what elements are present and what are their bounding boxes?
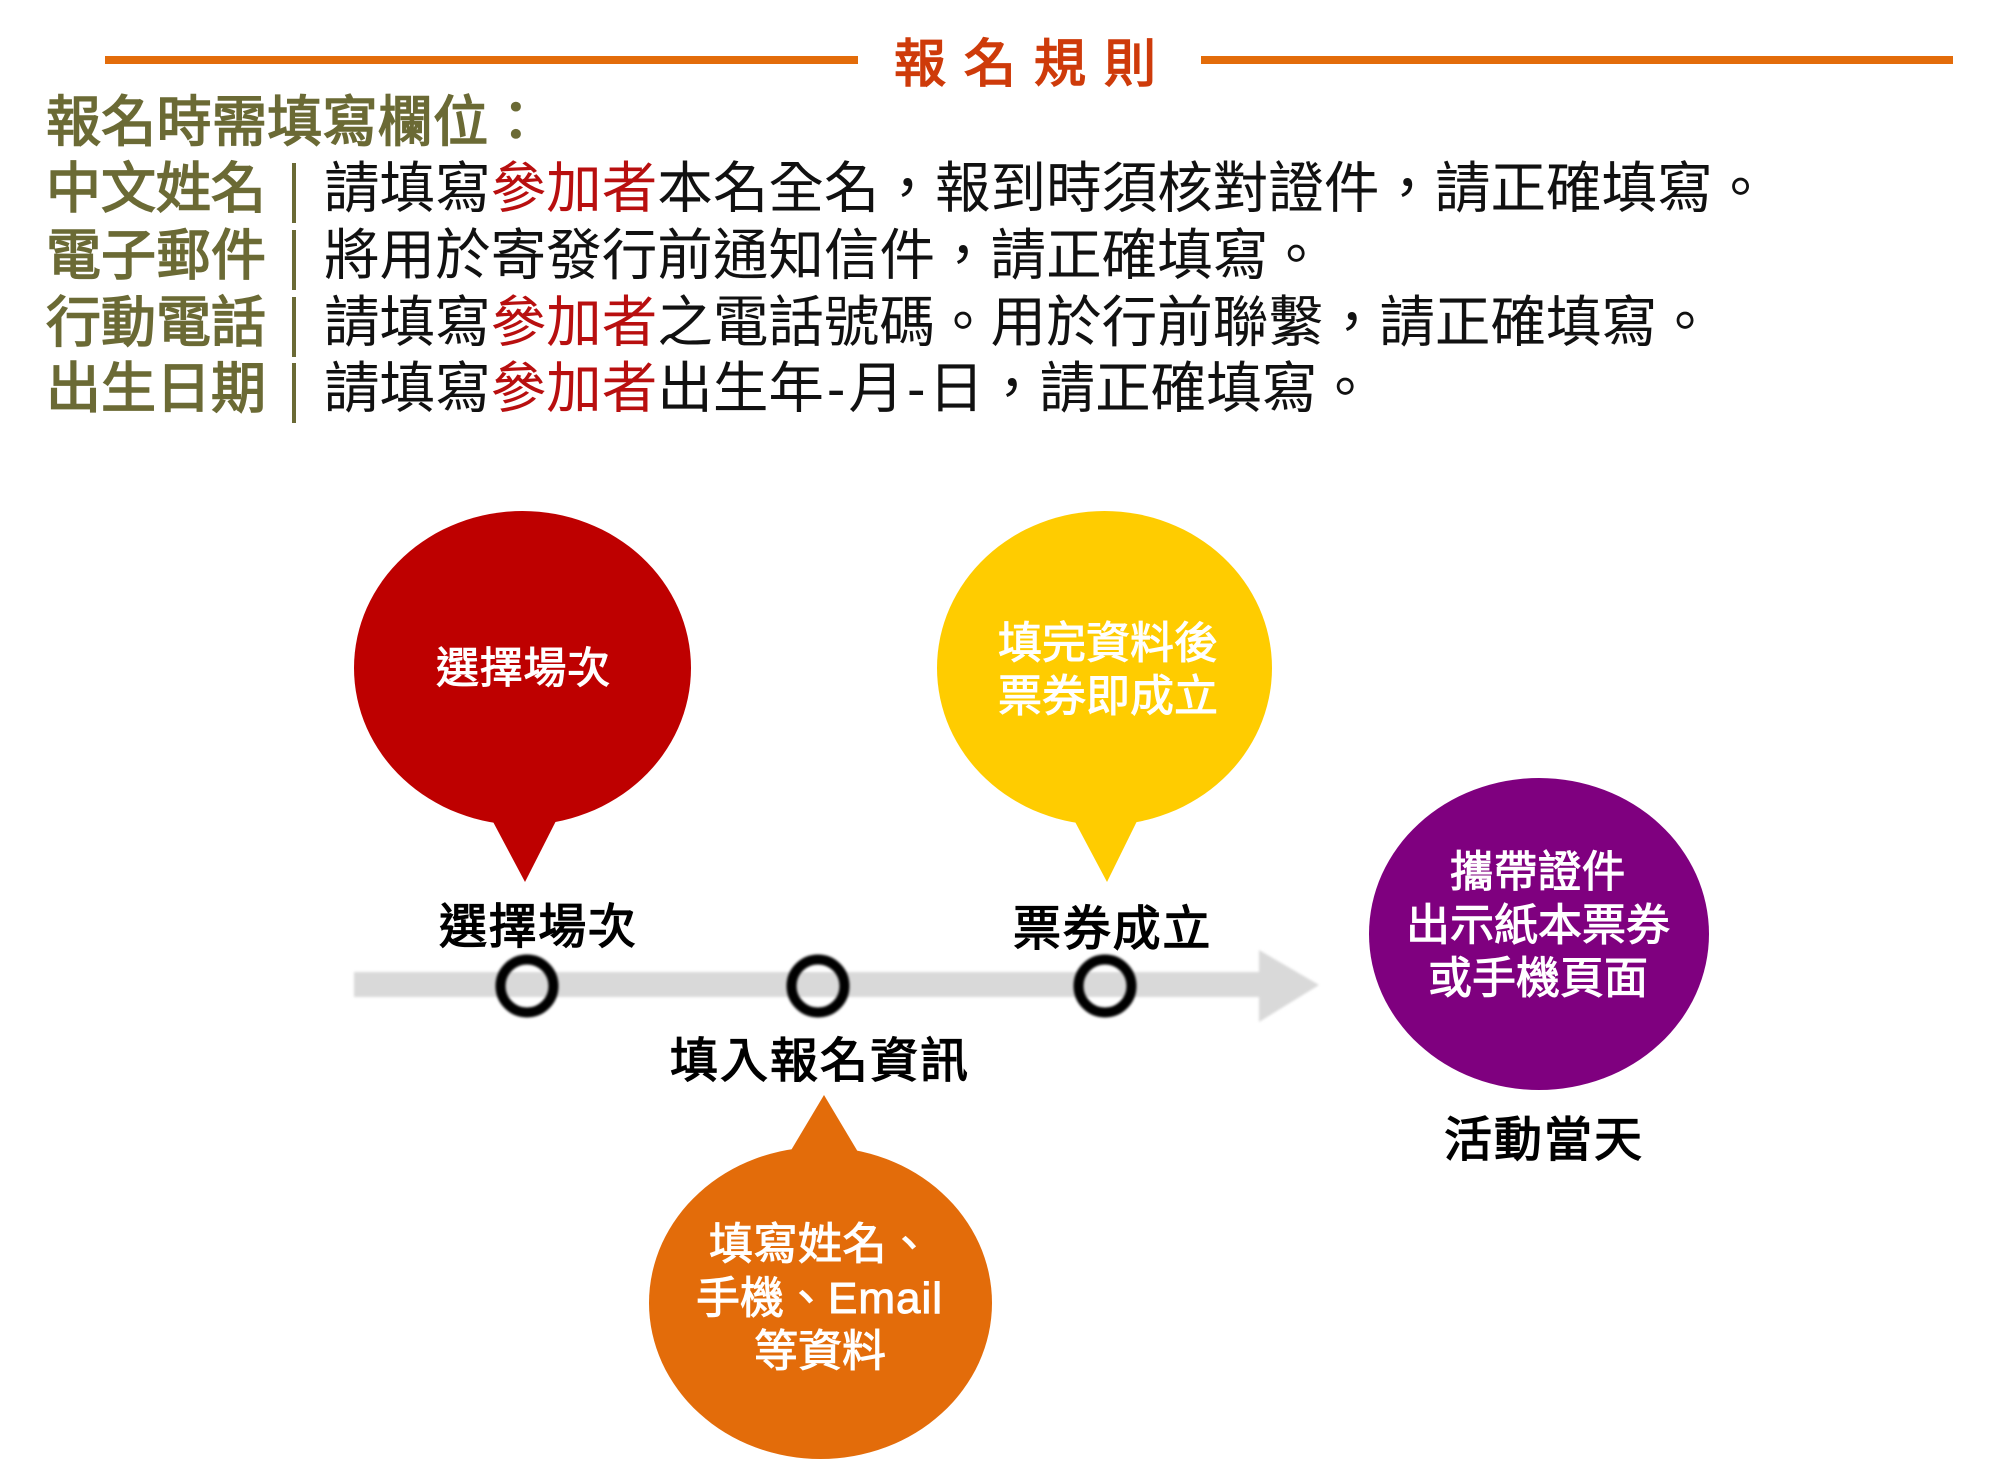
timeline node 1 bbox=[500, 960, 554, 1012]
callout: yellow bbox=[937, 511, 1272, 882]
text block: required fields bbox=[46, 91, 1768, 423]
timeline arrow bbox=[354, 950, 1319, 1022]
title: 報名規則 with rules: 報名規則 bbox=[894, 36, 1174, 94]
callout: orange: 手機、Email bbox=[696, 1274, 943, 1323]
row: Chinese name: 中文姓名 bbox=[46, 158, 266, 220]
row: birth date: 請填寫參加者出生年-月-日，請正確填寫。 bbox=[324, 358, 1373, 420]
callout: purple: 或手機頁面 bbox=[1428, 954, 1648, 1003]
callout: purple: 出示紙本票券 bbox=[1406, 901, 1670, 950]
row: email: 電子郵件 bbox=[46, 224, 266, 286]
row: birth date: 出生日期 bbox=[46, 358, 266, 420]
callout: red bbox=[354, 511, 691, 882]
callout: purple bbox=[1369, 778, 1709, 1090]
callout: orange bbox=[649, 1095, 992, 1459]
callout: orange: 填寫姓名、 bbox=[709, 1220, 932, 1269]
label: event day: 活動當天 bbox=[1444, 1114, 1644, 1167]
timeline node 3 bbox=[1078, 960, 1132, 1012]
heading: fields: 報名時需填寫欄位： bbox=[46, 91, 544, 153]
title: 報名規則 with rules bbox=[105, 36, 1953, 94]
callout: yellow: 填完資料後 bbox=[998, 619, 1218, 668]
timeline node 2 bbox=[792, 960, 844, 1012]
row: email: 將用於寄發行前通知信件，請正確填寫。 bbox=[324, 224, 1324, 286]
label: choose session: 選擇場次 bbox=[439, 901, 637, 954]
callout: yellow: 票券即成立 bbox=[998, 672, 1218, 721]
callout: orange: 等資料 bbox=[754, 1327, 886, 1376]
label: fill in registration info: 填入報名資訊 bbox=[670, 1035, 970, 1088]
row: mobile phone: 請填寫參加者之電話號碼。用於行前聯繫，請正確填寫。 bbox=[324, 292, 1713, 354]
row: mobile phone: 行動電話 bbox=[46, 292, 266, 354]
callout: purple: 攜帶證件 bbox=[1450, 849, 1626, 897]
callout: red: 選擇場次 bbox=[436, 645, 611, 693]
row: Chinese name: 請填寫參加者本名全名，報到時須核對證件，請正確填寫。 bbox=[324, 158, 1768, 220]
label: ticket confirmed: 票券成立 bbox=[1013, 903, 1212, 956]
